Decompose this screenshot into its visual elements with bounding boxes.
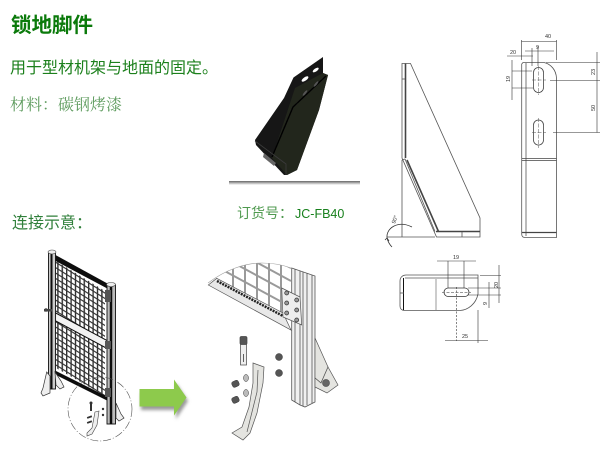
detail circle parts — [87, 402, 104, 436]
bolt at rail — [44, 308, 52, 312]
fence assembly illustration — [41, 250, 124, 424]
title: 锁地脚件 — [11, 14, 93, 37]
side view drawing — [385, 64, 480, 247]
description text: 用于型材机架与地面的固定。 — [10, 59, 218, 77]
nuts and screws — [231, 354, 282, 404]
aluminium posts — [292, 268, 315, 407]
front view drawing: 19 — [506, 76, 512, 82]
dimensions — [437, 261, 501, 343]
lower mesh panel — [56, 318, 105, 396]
front view drawing: 9 — [536, 45, 539, 51]
front view drawing — [506, 34, 600, 238]
bracket part — [232, 363, 264, 440]
front view drawing: 40 — [545, 34, 551, 40]
connector plate with bolts — [282, 288, 302, 325]
bracket — [255, 57, 328, 175]
cropped mesh — [226, 263, 291, 312]
material text: 材料：碳钢烤漆 — [10, 96, 122, 114]
slot — [444, 288, 469, 296]
left post — [48, 250, 56, 389]
front view drawing: 23 — [591, 69, 597, 75]
order number: 订货号： — [237, 205, 293, 221]
post feet — [41, 372, 124, 421]
expansion bolt — [240, 336, 247, 365]
upper mesh panel — [56, 261, 105, 341]
right foot — [315, 338, 338, 393]
angle mark: 90° — [391, 215, 400, 225]
panel bottom rail — [208, 278, 291, 330]
arrow shadow — [141, 383, 188, 419]
arrow — [140, 380, 188, 419]
connection detail illustration — [208, 262, 338, 440]
cropped arc edge — [208, 263, 291, 283]
bottom view drawing: 9 — [483, 302, 489, 305]
product photo — [229, 57, 360, 185]
bottom view drawing — [400, 255, 501, 343]
dashed detail circle — [68, 377, 132, 441]
order number: JC-FB40 — [295, 207, 344, 221]
right post — [105, 282, 116, 424]
photo shadow — [229, 181, 360, 185]
slots — [532, 66, 546, 148]
bottom view drawing: 25 — [462, 334, 468, 340]
angle mark — [385, 215, 412, 247]
front view drawing: 50 — [591, 105, 597, 111]
connection diagram heading: 连接示意： — [12, 213, 92, 232]
bottom view drawing: 19 — [453, 255, 459, 261]
dimensions — [507, 40, 600, 132]
front view drawing: 20 — [510, 50, 516, 56]
frame rails — [50, 252, 112, 401]
bottom view drawing: 20 — [494, 282, 500, 288]
